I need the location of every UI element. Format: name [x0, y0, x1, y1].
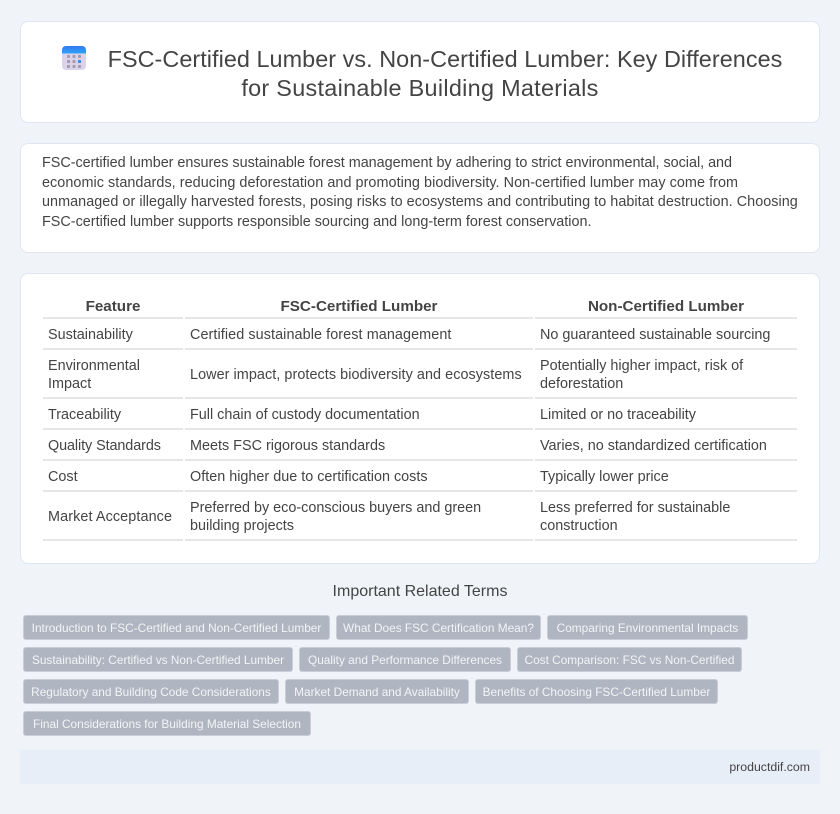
related terms tags: Cost Comparison: FSC vs Non-Certified [525, 653, 734, 667]
comparison table: Traceability [48, 407, 121, 423]
comparison table: Environmental [48, 358, 140, 374]
comparison table: Often higher due to certification costs [190, 469, 428, 485]
footer bar [20, 750, 820, 784]
comparison table: construction [540, 518, 618, 534]
comparison table: Lower impact, protects biodiversity and ecosystems [190, 367, 522, 383]
title: for Sustainable Building Materials [241, 75, 599, 101]
related terms tags: Regulatory and Building Code Considerations [31, 685, 271, 699]
comparison table: Non-Certified Lumber [588, 298, 744, 315]
comparison table: Certified sustainable forest management [190, 327, 452, 343]
title [108, 46, 782, 101]
comparison table: Sustainability [48, 327, 133, 343]
header card [20, 21, 820, 123]
related terms tags: Introduction to FSC-Certified and Non-Certified Lumber [32, 621, 321, 635]
comparison table: Typically lower price [540, 469, 669, 485]
comparison table panel [20, 273, 820, 564]
related terms tags: Market Demand and Availability [294, 685, 460, 699]
comparison table: Varies, no standardized certification [540, 438, 767, 454]
comparison table: building projects [190, 518, 294, 534]
comparison table: Impact [48, 376, 91, 392]
comparison table: Limited or no traceability [540, 407, 696, 423]
comparison table: Full chain of custody documentation [190, 407, 420, 423]
intro paragraph: FSC-certified lumber supports responsible sourcing and long-term forest conservation. [42, 214, 592, 230]
related terms tags: Final Considerations for Building Material Selection [33, 717, 301, 731]
related terms tags: What Does FSC Certification Mean? [343, 621, 534, 635]
comparison table: Less preferred for sustainable [540, 500, 730, 516]
intro text panel [20, 143, 820, 253]
intro paragraph: FSC-certified lumber ensures sustainable forest management by adhering to strict environmental, social, and [42, 155, 732, 171]
related terms tags: Benefits of Choosing FSC-Certified Lumber [483, 685, 710, 699]
comparison table: Meets FSC rigorous standards [190, 438, 385, 454]
comparison table: Preferred by eco-conscious buyers and green [190, 500, 481, 516]
title: FSC-Certified Lumber vs. Non-Certified Lumber: Key Differences [108, 46, 782, 72]
comparison table: FSC-Certified Lumber [281, 298, 437, 315]
comparison table: Potentially higher impact, risk of [540, 358, 743, 374]
comparison table [43, 298, 797, 541]
comparison table: deforestation [540, 376, 623, 392]
related terms heading: Important Related Terms [333, 583, 507, 600]
intro paragraph: economic standards, reducing deforestation and promoting biodiversity. Non-certified lumber may come from [42, 174, 738, 190]
related terms tags [23, 615, 748, 736]
comparison table: Feature [86, 298, 140, 315]
intro paragraph [42, 155, 798, 230]
intro paragraph: unmanaged or illegally harvested forests, posing risks to ecosystems and contributing to habitat destruction. Choosing [42, 194, 798, 210]
related terms tags: Comparing Environmental Impacts [557, 621, 738, 635]
footer source text: productdif.com [729, 760, 810, 774]
icon: calendar [62, 46, 86, 70]
comparison table: No guaranteed sustainable sourcing [540, 327, 770, 343]
comparison table: Quality Standards [48, 438, 161, 454]
comparison table: Market Acceptance [48, 509, 172, 525]
related terms tags: Sustainability: Certified vs Non-Certified Lumber [32, 653, 284, 667]
comparison table: Cost [48, 469, 78, 485]
related terms tags: Quality and Performance Differences [308, 653, 502, 667]
